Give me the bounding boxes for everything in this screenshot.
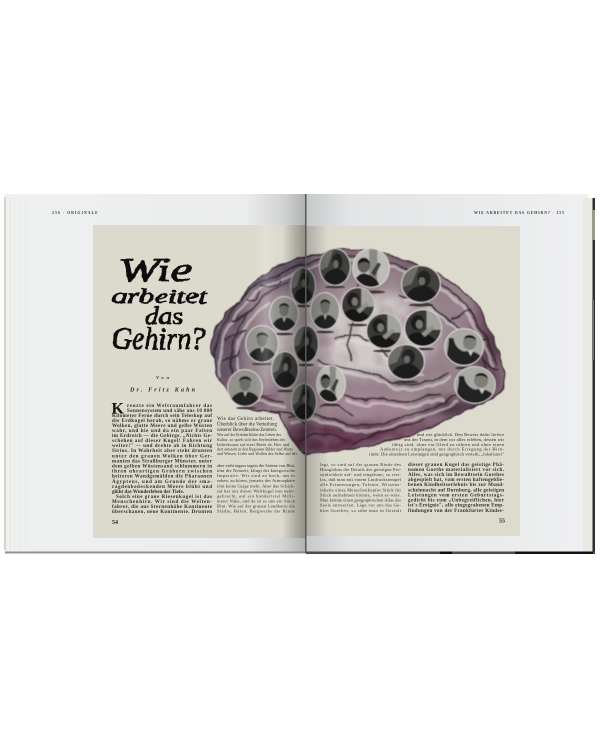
article: right column 2: abgespielt hat, vom ersten haftengeblie- — [408, 478, 504, 483]
article: right column 2: nomen Goethe materialisiert vor sich. — [408, 468, 505, 473]
article: middle column: tönt keine Geige mehr. Aber das Schick- — [217, 483, 296, 488]
article: right column 2: scheinnacht auf Dornburg, alle geistigen — [408, 488, 504, 493]
handwritten title: arbeitet — [112, 286, 208, 308]
panel: left magazine page — [93, 225, 305, 538]
panel: reproduced magazine spread — [93, 225, 520, 538]
article: left column — [112, 404, 213, 515]
portrait 7 — [341, 287, 375, 326]
drop cap K: K — [112, 400, 124, 418]
article: right column 2: gedicht bis zum „Unbegreiflichen, hier — [408, 498, 505, 504]
article: middle column: sehen, zu hören, jenseits der Atmosphäre — [217, 478, 295, 484]
byline: Von — [156, 375, 169, 380]
page number right: 55 — [499, 518, 505, 524]
article: right column 1: los, daß man mit einem Lindruckstempel — [320, 477, 402, 483]
brain outline — [212, 250, 505, 454]
article: left column: Sonnensystem und sähe aus 10 000 — [127, 409, 212, 414]
brain: mottling — [217, 251, 504, 449]
article: right column 2: ist's Ereignis", alle eingegrabenen Emp- — [408, 504, 504, 509]
portrait 11 — [404, 309, 442, 350]
article: right column 2: findungen von der Frankfurter Kinder- — [408, 509, 504, 514]
article: text below brain on right: und wie glücklich. Den Beweis dafür liefere — [417, 432, 504, 437]
article: text below brain on right — [369, 432, 505, 458]
article: right column 1: Hirnglobus die Details der geistigen Per- — [320, 467, 402, 472]
running head right: WIE ARBEITET DAS GEHIRN? · 255 — [474, 211, 565, 215]
article: text below brain on right: rinde. Die einzelnen Leistungen sind geographisch verteilt, „lokalisiert" — [369, 452, 504, 458]
portrait 5 — [269, 296, 299, 335]
brain: colour patches — [205, 248, 506, 454]
handwritten title — [112, 252, 208, 356]
article: left column: wahr, und hie und da ein paar Falten — [112, 429, 212, 434]
handwritten title: das — [145, 304, 183, 330]
article: brain caption: und Wissen, Liebe und Wollen des Selbst auf der — [217, 452, 298, 457]
article: middle column: Imperativ. Wir sind zu hoch, um es — [217, 473, 295, 479]
article: left column: Wolken, glatte Meere und gelbe Wüsten — [112, 424, 212, 429]
page number left: 54 — [112, 520, 118, 526]
article: left column: Solch eine graue Riesenkugel ist das — [116, 495, 212, 500]
article: right column 1: legt, so sind auf der grauen Rinde des — [320, 462, 401, 468]
article: right column 2: Leistungen vom ersten Geburtstags- — [408, 493, 504, 498]
brain base — [205, 245, 510, 460]
article: left column: dem gelben Wüstensand schlummern in — [112, 464, 212, 470]
article: brain caption: Wie das Gehirn arbeitet. — [217, 417, 274, 422]
left page — [5, 194, 306, 552]
article: left column: im Erdreich — die Gebirge. „Nichts Ge- — [112, 434, 212, 439]
portrait 3 — [352, 248, 390, 294]
brain: fold lines — [214, 257, 498, 445]
article: left column: heiteren Wandgemälden die Pharaonen — [112, 475, 212, 480]
article: brain caption: dort entsteht in den Regionen Bilder und Worte — [217, 448, 293, 452]
byline — [129, 375, 196, 394]
article: left column: Kilometer Ferne durch sein Teleskop auf — [112, 414, 212, 419]
article: right column 1: inhalte eines Menschenkopfes Stück für — [320, 487, 402, 492]
article: middle column: tönt die Neuzeit, klingt der kategorische — [217, 468, 295, 474]
byline: Dr. Fritz Kahn — [129, 388, 196, 394]
page stack on left edge — [4, 197, 26, 550]
article: right column 2: dieser grauen Kugel das geistige Phä- — [408, 463, 504, 468]
article: middle column: sal hat uns dieser Weltkugel nun nahe- — [217, 488, 296, 493]
article: brain caption: unserer Bewußtseins-Zentren. — [217, 428, 277, 433]
portrait 14 — [454, 366, 496, 404]
book: open spread — [4, 194, 595, 554]
brain illustration — [205, 245, 510, 460]
article: left column: unter den grauen Wolken über Ger- — [112, 454, 212, 459]
portrait 2 — [319, 248, 351, 288]
article: right column 2 — [408, 463, 505, 514]
article: right column 1: Seele entwerfen. Läge vor uns das Ge- — [320, 503, 402, 508]
running head left: 256 · ORIGINALE — [52, 211, 99, 215]
article: middle column: aber zieht tagaus tagein die Ströme von Blut, — [217, 463, 295, 469]
handwritten title: Wie — [118, 252, 193, 289]
portrait 6 — [310, 292, 340, 333]
panel: right magazine page — [306, 226, 520, 536]
article: text below brain on right: Außenreiz zu empfangen, nur durch Erregung der Hirn- — [380, 446, 504, 452]
article: middle column: Städte, Häfen, Bergwerke der Rinde — [217, 509, 295, 515]
portrait 9 — [293, 325, 319, 366]
portrait 13 — [387, 344, 425, 384]
article: left column: manien das Straßburger Münster, unter — [112, 459, 213, 464]
article: left column: Ägyptens, und am Grunde der sma- — [112, 479, 212, 485]
portrait 10 — [366, 313, 402, 352]
article: left column: Sirius. In Wahrheit aber steht drunten — [112, 449, 212, 454]
article: middle column: gebracht, auf ein hundertstel Milli- — [217, 494, 296, 500]
portrait 8 — [245, 325, 279, 365]
brain: fold highlights — [219, 261, 492, 432]
portrait 4 — [401, 265, 441, 306]
article: middle column — [217, 463, 296, 515]
article: left column: schehen auf dieser Kugel! Fahren wir — [112, 439, 213, 444]
portrait medallions — [227, 248, 496, 421]
article: right column 1: alle Erinnerungen, Talente, Wissens- — [320, 482, 402, 488]
article: brain caption — [217, 417, 298, 457]
article: left column: ihren uhrartigen Gräbern zwischen — [112, 470, 212, 475]
article: brain caption: Wie auf der Erdoberfläche das Leben der — [217, 433, 282, 437]
article: brain caption: Individuums auf einer Rinde ab. Hier und — [217, 443, 289, 447]
portrait 18 — [291, 383, 317, 421]
article: brain caption: Kultur, so spielt sich das Seelenleben des — [217, 438, 286, 443]
article: text below brain on right: uns der Traum, in dem wir alles erleben, dessen wir — [404, 437, 504, 443]
article: left column: Menschenhirn. Wir sind die Welten- — [112, 500, 212, 505]
article: right column 1: Man könnte einen geographischen Atlas der — [320, 498, 402, 502]
portrait 17 — [316, 365, 346, 406]
article: right column 1: hirn Goethes, so sähe man in Gestalt — [320, 508, 402, 514]
article: middle column: Blut. Wie auf der grauen Landkarte die — [217, 504, 295, 509]
article: right column 2: benen Kindheitserlebnis bis zur Mond- — [408, 483, 504, 488]
gutter shading over magazine — [255, 194, 328, 553]
article: left column: reuzte ein Weltraumfahrer das — [127, 404, 212, 409]
bottom edge — [5, 552, 595, 554]
article: left column: weiter!" — und drehte ab in Richtung — [112, 444, 212, 449]
article: left column: ragdenbedeckenden Meere blüht und — [112, 485, 212, 490]
article: brain caption: Überblick über die Verteilung — [217, 422, 278, 428]
portrait 12 — [444, 328, 484, 370]
article: left column: fahrer, die aus Sternenhöhe Kontinente — [112, 505, 213, 510]
article: right column 1 — [320, 462, 402, 514]
spine line — [305, 194, 306, 553]
article: left column: überschauen, neue Kontinente. Drunten — [112, 510, 212, 515]
portrait 16 — [227, 369, 263, 409]
portrait 15 — [271, 351, 299, 392]
right page — [306, 194, 588, 552]
handwritten title: Gehirn? — [112, 320, 205, 356]
portrait 1 — [290, 267, 316, 307]
article: right column 1: sönlichkeit auf- und eingebaut, so rest- — [320, 472, 402, 478]
article: left column: glüht das Wunderleben der Tiefe. — [112, 490, 185, 495]
article: right column 2: Alles, was sich im Bewußtsein Goethes — [408, 473, 504, 478]
article: right column 1: Stück aufnehmen könnte, wenn es wäre. — [320, 492, 401, 498]
article: middle column: meter Nähe, und da ist es uns ein Stück — [217, 498, 296, 504]
right page edge and cover — [583, 198, 595, 554]
article: left column: die Erdkugel herab, so nähme er graue — [112, 419, 213, 424]
article: text below brain on right: fähig sind, ohne ein Glied zu rühren und ohne einen — [392, 442, 505, 448]
